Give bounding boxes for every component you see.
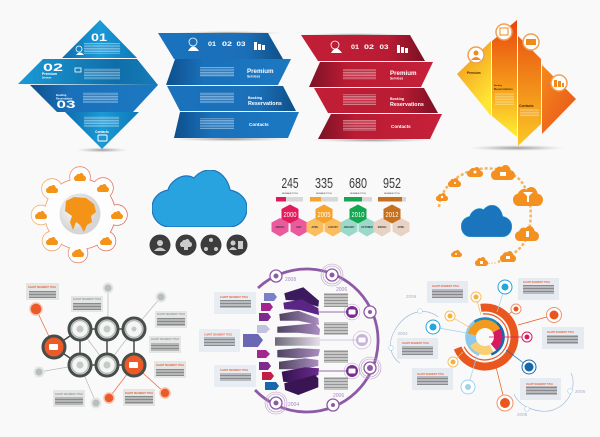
year labels: 2008 <box>406 294 417 299</box>
heading: 01: 01 <box>91 32 107 44</box>
thin orbits <box>391 311 573 411</box>
numbers: 680 <box>349 175 367 192</box>
number titles: NUMBER TITLE <box>384 193 401 195</box>
icon: person <box>76 46 84 55</box>
year labels <box>398 294 586 417</box>
row labels: Premium <box>390 70 417 77</box>
text: Booking Reservations: Reservations <box>56 96 73 100</box>
number titles: NUMBER TITLE <box>282 193 299 195</box>
year labels: 2006 <box>333 393 344 399</box>
panel: radial donut: CHART SEGMENT TITLE <box>417 373 445 376</box>
labels: Reservations <box>494 87 513 91</box>
year labels <box>285 277 347 408</box>
panel: node network <box>26 283 187 408</box>
panel: blue ribbon <box>158 31 299 142</box>
callouts <box>199 292 256 387</box>
panel: number stats: MARCH <box>276 226 285 229</box>
hex labels: 2010 <box>352 210 364 219</box>
icon badge: mail <box>523 34 539 50</box>
hex labels: 2005 <box>318 210 330 219</box>
panel: node network: CHART SEGMENT TITLE <box>157 313 185 316</box>
panel: purple stack timeline: CHART SEGMENT TITLE <box>220 369 249 372</box>
panel: node network: CHART SEGMENT TITLE <box>55 393 83 396</box>
number titles: NUMBER TITLE <box>350 193 367 195</box>
outer arc <box>458 308 514 367</box>
icon: mail <box>98 135 107 141</box>
panel: node network: CHART SEGMENT TITLE <box>156 364 184 367</box>
panel: number stats: APRIL <box>398 226 405 229</box>
step numbers: 02 <box>364 45 375 51</box>
stacked slabs <box>275 287 320 395</box>
row labels: Booking <box>390 97 404 101</box>
hex labels: 2000 <box>284 210 296 219</box>
row labels <box>247 68 282 127</box>
icon: bars <box>397 45 408 53</box>
scalloped outline <box>32 167 127 262</box>
year labels: 2006 <box>336 287 347 293</box>
white fill <box>32 167 127 262</box>
heading: 02: 02 <box>43 62 63 74</box>
step numbers <box>351 45 389 51</box>
numbers: 245 <box>282 175 298 192</box>
links <box>54 329 134 365</box>
heading: 03: 03 <box>56 99 76 111</box>
icon badge: person <box>468 47 484 63</box>
globe <box>60 194 100 234</box>
icon: person <box>188 38 199 51</box>
icon: laptop <box>75 68 81 72</box>
step numbers <box>208 42 246 48</box>
callouts <box>397 278 584 400</box>
panel: node network: CHART SEGMENT TITLE <box>73 298 101 301</box>
orbit dashes <box>439 168 531 262</box>
connector lines <box>319 312 356 371</box>
donut <box>472 324 498 351</box>
row labels <box>390 70 424 129</box>
icon badge: laptop <box>496 24 512 40</box>
panel: radial donut <box>389 278 586 417</box>
text blocks <box>200 67 234 129</box>
panel: radial donut: CHART SEGMENT TITLE <box>526 383 554 386</box>
tags <box>243 293 279 390</box>
year labels: 2004 <box>288 402 299 408</box>
panel: red ribbon <box>300 33 442 142</box>
number titles: NUMBER TITLE <box>316 193 333 195</box>
panel: number stats: MAY <box>297 226 302 229</box>
arc nodes <box>270 269 376 411</box>
text blocks <box>83 43 120 127</box>
center cloud <box>461 205 512 237</box>
progress bars <box>276 197 406 202</box>
big blue cloud <box>152 170 247 227</box>
icon: bars <box>254 42 265 50</box>
labels <box>467 71 534 108</box>
panel: radial donut: CHART SEGMENT TITLE <box>523 281 551 284</box>
hex labels <box>284 210 398 219</box>
step numbers: 03 <box>380 45 389 51</box>
hexagons <box>272 204 410 236</box>
row labels: Contacts <box>391 124 411 129</box>
labels: Premium <box>467 71 481 75</box>
year labels: 2006 <box>575 389 586 394</box>
satellites <box>426 280 562 411</box>
row labels: Premium <box>247 68 274 75</box>
icon: person <box>331 41 342 53</box>
panel: number stats: APRIL <box>312 226 319 229</box>
orange clouds <box>436 165 543 266</box>
step numbers: 01 <box>208 42 217 48</box>
step numbers: 02 <box>222 42 233 48</box>
donut outer strips <box>466 318 504 355</box>
numbers: 952 <box>383 175 401 192</box>
panel: purple stack timeline <box>199 264 381 414</box>
panel: node network: CHART SEGMENT TITLE <box>151 338 179 341</box>
icon badge: bars <box>551 75 567 91</box>
callouts <box>26 283 187 407</box>
row labels: Services <box>247 74 260 78</box>
cloud icons <box>441 170 533 264</box>
text: Premium Services: Premium <box>42 72 57 76</box>
text: Contacts: Contacts <box>95 130 109 134</box>
panel: purple stack timeline: CHART SEGMENT TITLE <box>204 334 233 336</box>
number titles <box>282 193 401 195</box>
panel: number stats: MARCH <box>378 226 387 229</box>
row labels: Services <box>390 76 403 80</box>
labels: Booking <box>494 85 503 87</box>
row labels: Contacts <box>249 122 269 127</box>
panel: number stats: OCTOBER <box>361 227 373 229</box>
panel: number stats: JANUARY <box>343 226 355 229</box>
text: Premium Services: Services <box>42 78 52 80</box>
hex labels: 2012 <box>386 210 398 219</box>
panel: purple stack timeline: CHART SEGMENT TITLE <box>220 296 249 299</box>
satellites <box>34 284 166 408</box>
panel: node network: CHART SEGMENT TITLE <box>125 392 153 395</box>
small clouds <box>35 173 123 257</box>
panel: number stats <box>272 175 410 236</box>
numbers: 335 <box>315 175 333 192</box>
row labels: Booking <box>248 96 262 100</box>
panel: number stats: AUGUST <box>328 226 338 229</box>
panel: node network: CHART SEGMENT TITLE <box>28 286 56 289</box>
inner arc <box>464 314 508 360</box>
right media nodes <box>346 306 368 377</box>
arc <box>255 269 378 412</box>
labels: Contacts <box>519 104 534 108</box>
text blocks <box>343 69 376 131</box>
spokes <box>433 287 505 387</box>
year labels: 2008 <box>517 412 528 417</box>
row labels: Reservations <box>248 101 282 107</box>
panel: radial donut: CHART SEGMENT TITLE <box>432 285 460 288</box>
text blocks <box>495 93 539 117</box>
row labels: Reservations <box>390 102 424 108</box>
text blocks <box>324 293 348 390</box>
panel: globe cloud ring <box>32 167 127 262</box>
panel: radial donut: CHART SEGMENT TITLE <box>402 342 430 345</box>
dark icon circles <box>150 234 248 256</box>
panel: radial donut: CHART SEGMENT TITLE <box>547 331 575 334</box>
step numbers: 03 <box>236 42 246 48</box>
year labels: 2008 <box>285 277 296 283</box>
text: Booking Reservations: Booking <box>56 94 66 97</box>
panel: blue diamond <box>18 20 158 152</box>
nodes <box>69 318 145 376</box>
panel: cloud orbit <box>436 165 543 266</box>
step numbers: 01 <box>351 45 360 51</box>
panel: orange diamond <box>457 20 576 151</box>
numbers <box>282 175 401 192</box>
year labels: 2004 <box>398 331 408 336</box>
